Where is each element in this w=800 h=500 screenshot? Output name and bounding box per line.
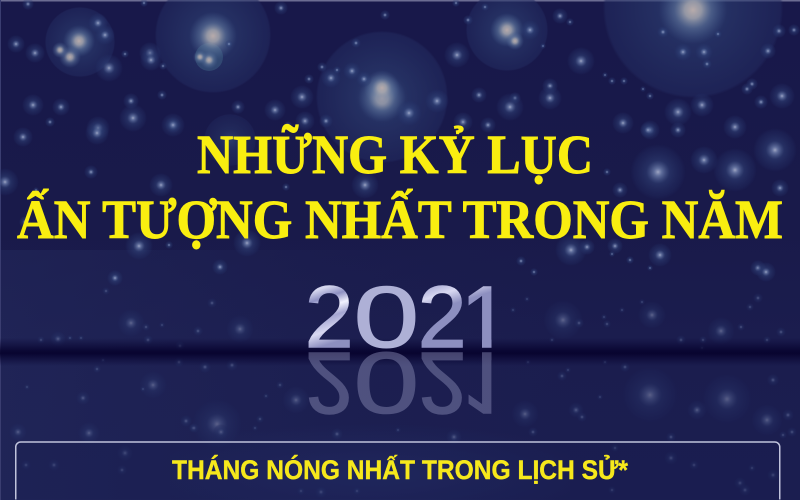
- year 2021: 1: [461, 269, 509, 366]
- panel: hottest month: [16, 442, 780, 500]
- year 2021: 0: [354, 269, 419, 366]
- year reflection: [308, 352, 492, 415]
- year reflection: 0: [354, 334, 419, 431]
- title: [17, 124, 783, 250]
- year 2021: [308, 285, 492, 348]
- dim bokeh lights above the horizon: [37, 287, 786, 351]
- year reflection: 1: [461, 334, 509, 431]
- title: NHỮNG KỶ LỤC: [197, 124, 593, 185]
- panel heading: THÁNG NÓNG NHẤT TRONG LỊCH SỬ*: [172, 453, 628, 485]
- year reflection: 2: [305, 334, 353, 431]
- large bokeh bubbles: [45, 0, 783, 166]
- year 2021: 2: [305, 269, 353, 366]
- dim bokeh lights below the horizon: [9, 357, 797, 498]
- year 2021: 2: [418, 269, 466, 366]
- small bokeh lights, upper: [0, 0, 800, 286]
- year reflection: 2: [418, 334, 466, 431]
- horizon band: [0, 338, 800, 366]
